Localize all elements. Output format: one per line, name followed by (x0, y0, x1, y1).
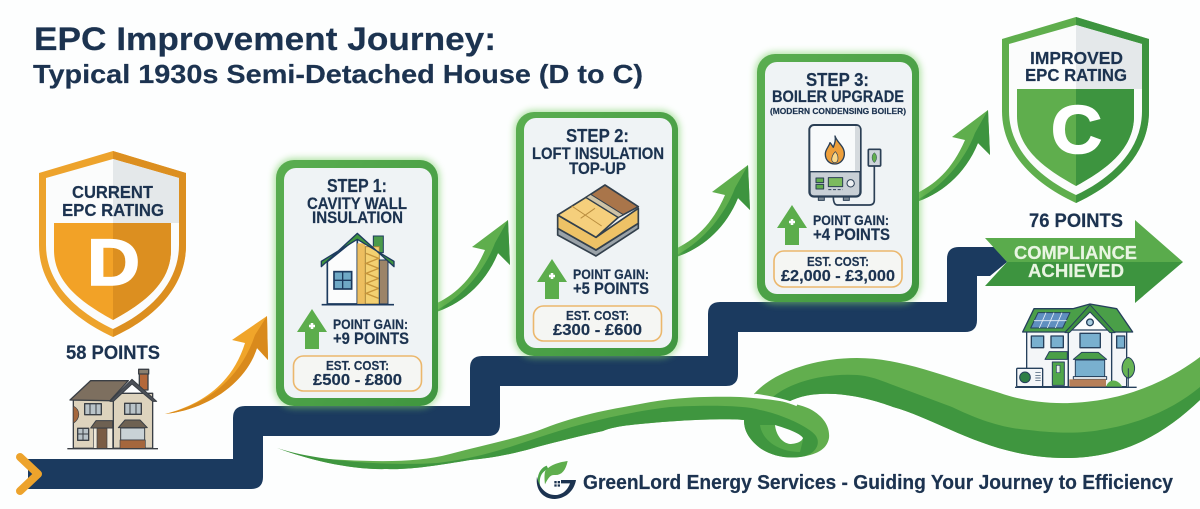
icon: improved green house (1015, 304, 1137, 387)
panel: step 1 cavity wall insulation (274, 158, 440, 408)
icon: house with cavity wall (321, 233, 394, 305)
callout: estimated cost: EST. COST: (326, 358, 389, 373)
icon: loft insulation layers (558, 185, 638, 256)
panel: step 3 boiler upgrade: STEP 3: (806, 69, 869, 90)
text: point gain: POINT GAIN: (573, 266, 649, 282)
callout: estimated cost (534, 306, 662, 341)
shield: improved EPC rating C: EPC RATING (1025, 65, 1127, 85)
panel: step 3 boiler upgrade (755, 52, 921, 304)
arrow: orange from house to step 1 (165, 316, 268, 414)
callout: estimated cost (294, 356, 422, 391)
callout: estimated cost: EST. COST: (807, 254, 869, 269)
shield: improved EPC rating C (1002, 17, 1149, 203)
callout: estimated cost: £500 - £800 (313, 372, 402, 389)
shield: current EPC rating D: EPC RATING (62, 200, 164, 220)
shield: improved EPC rating C: IMPROVED (1030, 48, 1123, 68)
icon: point gain arrow (777, 205, 807, 245)
navy stepped path (28, 247, 1007, 489)
icon: orange start chevron (20, 457, 38, 491)
arrow: compliance achieved (985, 220, 1183, 303)
text: point gain (573, 266, 649, 298)
footer tagline: GreenLord Energy Services - Guiding Your Journey to Efficiency (583, 472, 1174, 494)
panel: step 2 loft insulation (514, 110, 680, 358)
arrow: green step 2 to step 3 (673, 165, 750, 258)
logo (537, 461, 576, 499)
panel: step 3 boiler upgrade: BOILER UPGRADE (772, 88, 904, 106)
icon: old house (67, 369, 158, 449)
callout: estimated cost (774, 251, 902, 287)
text: point gain: +5 POINTS (573, 279, 649, 298)
callout: estimated cost: £300 - £600 (553, 322, 642, 339)
arrow: compliance achieved: ACHIEVED (1028, 260, 1124, 281)
icon: point gain arrow (297, 309, 327, 349)
shield: current EPC rating D (39, 151, 186, 337)
ribbon swoosh (277, 357, 1200, 469)
shield: current EPC rating D: CURRENT (72, 182, 153, 202)
text: point gain: POINT GAIN: (333, 316, 408, 332)
icon: condensing boiler (809, 125, 881, 205)
arrow: green step 3 to improved rating (913, 110, 990, 203)
callout: estimated cost: EST. COST: (566, 308, 629, 323)
shield: improved EPC rating C: C (1051, 92, 1102, 168)
text: point gain: +4 POINTS (813, 225, 890, 244)
title: Typical 1930s Semi-Detached House (D to C) (33, 59, 643, 89)
panel: step 1 cavity wall insulation: INSULATION (312, 209, 403, 227)
panel: step 2 loft insulation: LOFT INSULATION (532, 145, 664, 163)
text: 58 points: 58 POINTS (66, 343, 160, 364)
callout: estimated cost: £2,000 - £3,000 (781, 268, 895, 285)
arrow: green step 1 to step 2 (433, 220, 510, 313)
shield: current EPC rating D: D (87, 225, 140, 299)
panel: step 1 cavity wall insulation: STEP 1: (327, 175, 387, 196)
panel: step 2 loft insulation: STEP 2: (566, 125, 629, 146)
title (33, 21, 643, 89)
text: point gain (813, 212, 890, 244)
panel: step 1 cavity wall insulation: CAVITY WALL (307, 195, 407, 213)
text: point gain (333, 316, 409, 348)
text: point gain: POINT GAIN: (813, 212, 889, 228)
icon: point gain arrow (537, 259, 567, 299)
panel: step 3 boiler upgrade: (MODERN CONDENSING BOILER) (770, 106, 906, 116)
panel: step 2 loft insulation: TOP-UP (569, 160, 626, 178)
arrow: compliance achieved: COMPLIANCE (1014, 242, 1137, 263)
text: 76 points: 76 POINTS (1029, 211, 1123, 232)
title: EPC Improvement Journey: (34, 21, 496, 57)
text: point gain: +9 POINTS (333, 329, 409, 348)
